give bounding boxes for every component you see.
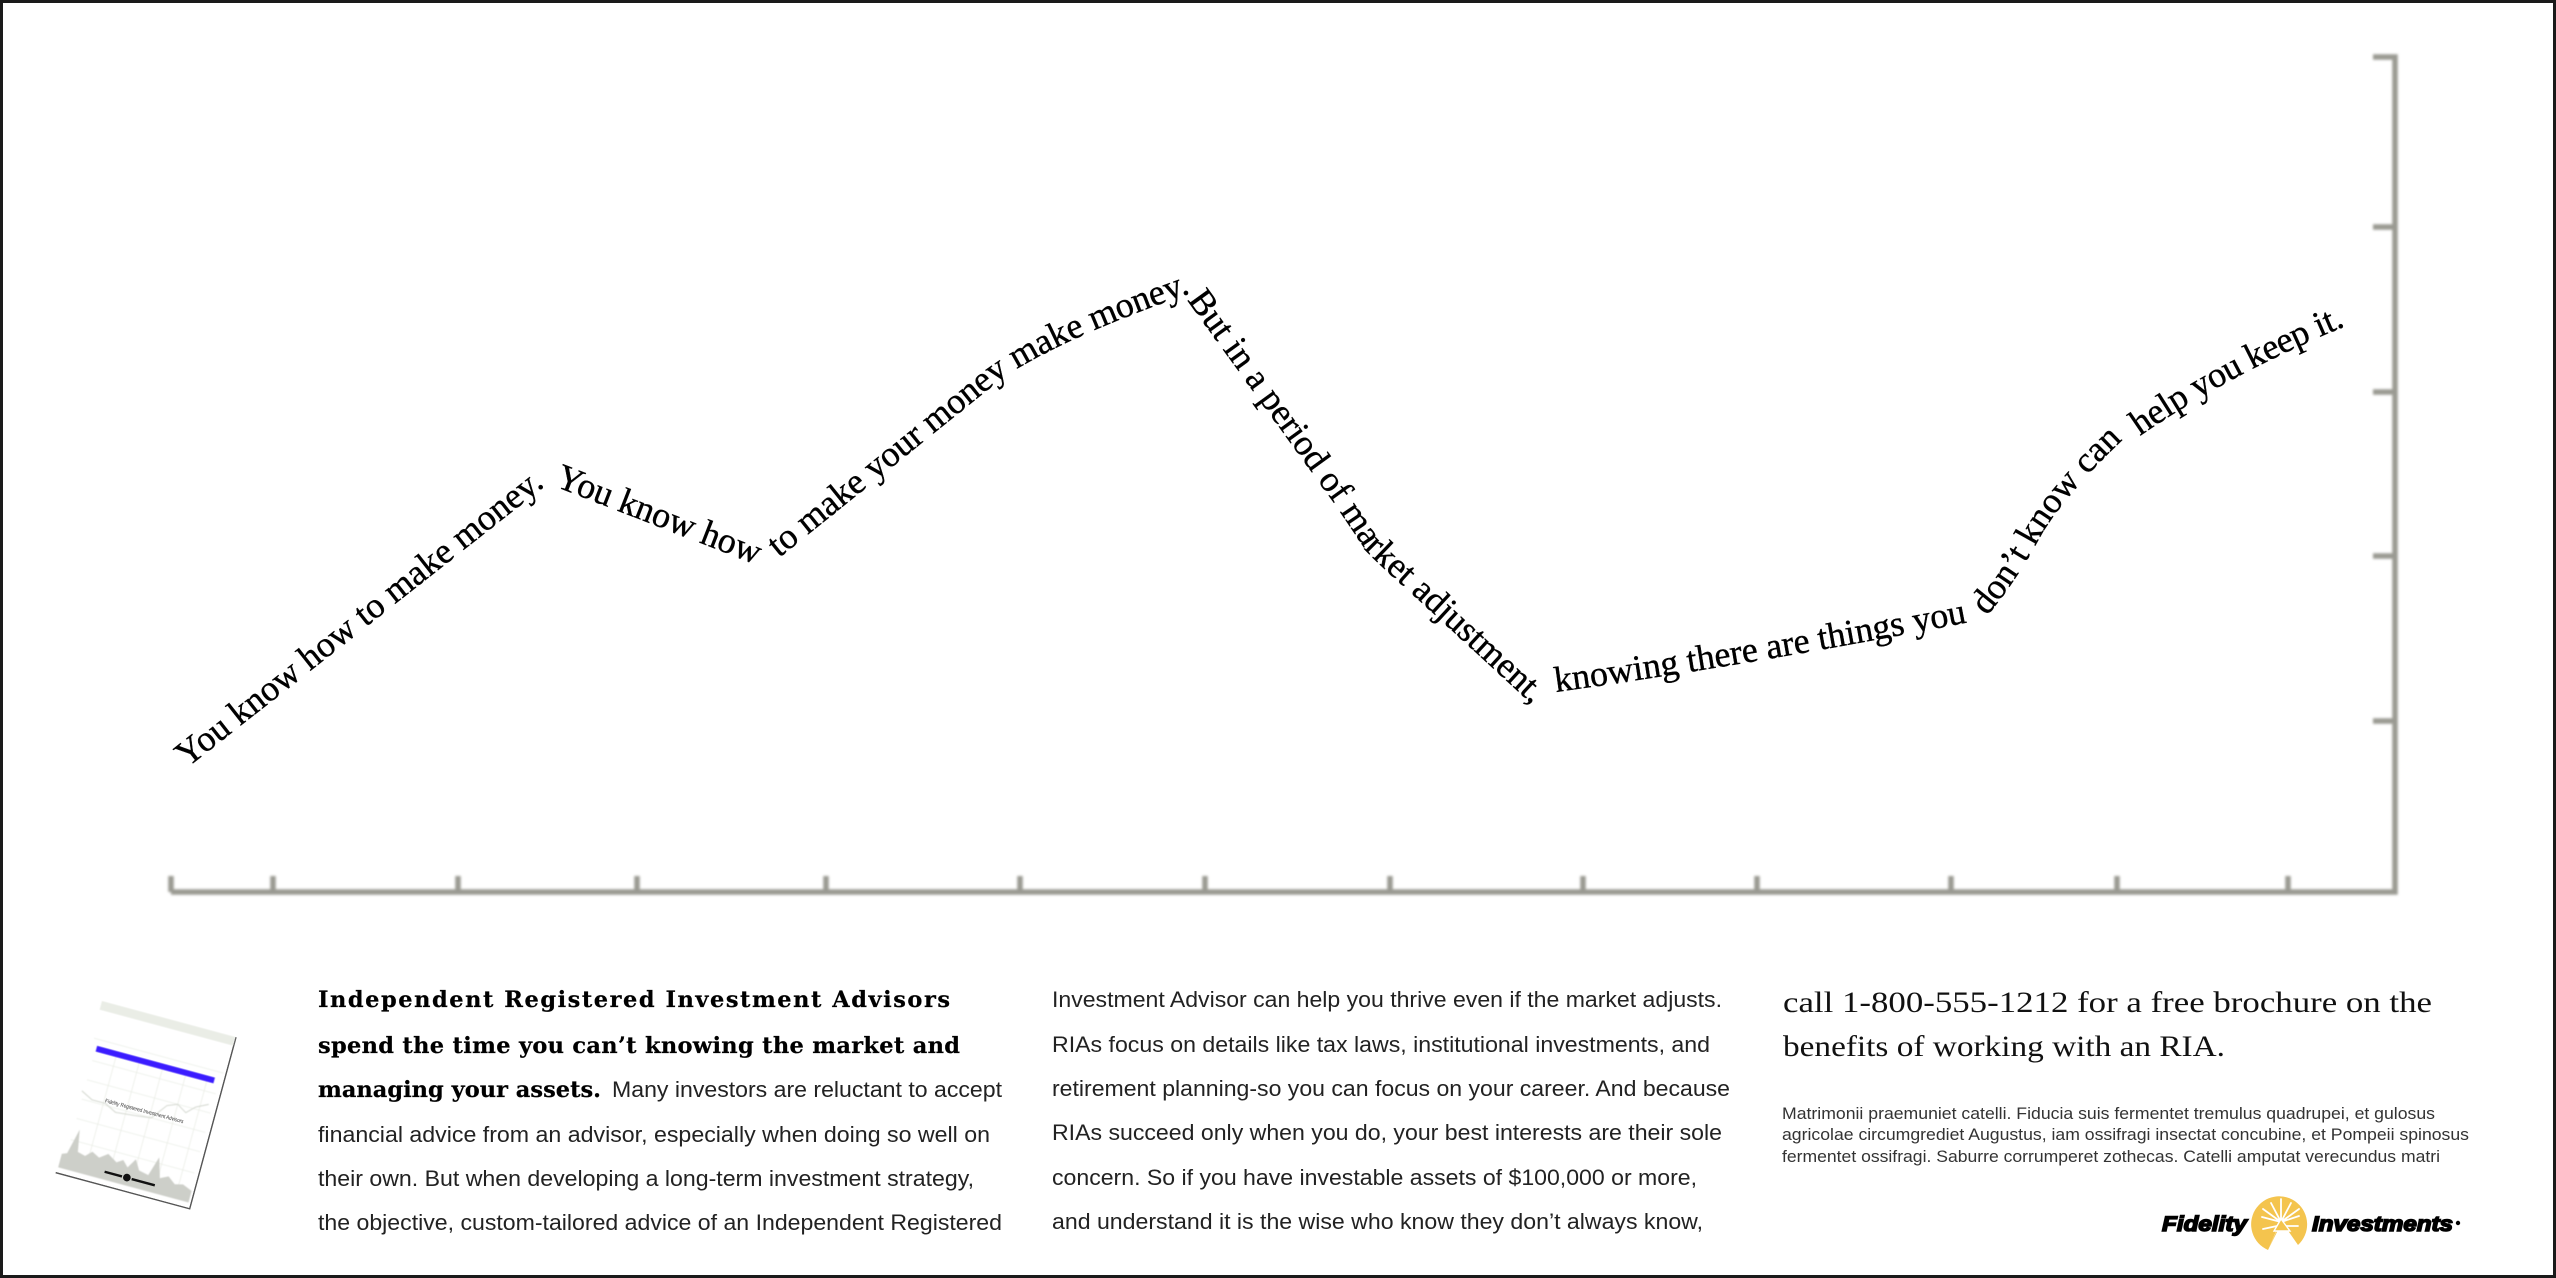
brochure blue bar [96,1046,215,1083]
body text column 1 [318,987,1003,1235]
brochure shadow [55,1001,237,1210]
fine print: agricolae circumgrediet Augustus, iam ossifragi insectat concubine, et Pompeii spinosus [1782,1125,2469,1144]
brochure title: Fidelity Registered Investment Advisors [104,1098,184,1125]
call to action: call 1-800-555-1212 for a free brochure on the [1783,986,2432,1019]
body text column 1: Many investors are reluctant to accept [612,1077,1003,1102]
body text column 2: RIAs succeed only when you do, your best interests are their sole [1052,1120,1722,1145]
chart line made of text: You know how to make money. [172,476,543,764]
body text column 2 [1052,987,1730,1234]
fine print: Matrimonii praemuniet catelli. Fiducia suis fermentet tremulus quadrupei, et gulosus [1782,1104,2435,1123]
body text column 1: Independent Registered Investment Advisors [318,987,950,1013]
body text column 2: concern. So if you have investable assets of $100,000 or more, [1052,1165,1697,1190]
registered mark [2456,1221,2460,1225]
call to action [1783,986,2432,1063]
body text column 1: the objective, custom-tailored advice of an Independent Registered [318,1210,1002,1235]
body text column 1: their own. But when developing a long-term investment strategy, [318,1166,974,1191]
brochure logo [104,1168,156,1189]
chart axes [171,57,2395,892]
body text column 2: Investment Advisor can help you thrive even if the market adjusts. [1052,987,1722,1012]
chart line made of text: help you keep it. [2126,312,2344,436]
fine print [1782,1104,2469,1166]
body text column 2: retirement planning-so you can focus on your career. And because [1052,1076,1730,1101]
fine print: fermentet ossifragi. Saburre corrumperet zothecas. Catelli amputat verecundus matri [1782,1147,2440,1166]
chart line made of text: But in a period of market adjustment, [1187,286,1537,705]
Fidelity Investments logo [2162,1196,2460,1250]
chart line made of text [172,279,2344,764]
chart line made of text: to make your money make money. [769,279,1188,556]
icon: sun logo [2251,1196,2307,1250]
body text column 1: managing your assets. [318,1077,601,1103]
body text column 1: spend the time you can’t knowing the market and [318,1033,960,1059]
brochure volume chart [58,1127,199,1202]
body text column 2: RIAs focus on details like tax laws, institutional investments, and [1052,1032,1710,1057]
Fidelity Investments logo: Fidelity [2162,1213,2249,1236]
Fidelity Investments logo: Investments [2312,1213,2453,1236]
chart line made of text: don’t know can [1973,430,2122,613]
call to action: benefits of working with an RIA. [1783,1030,2225,1063]
body text column 2: and understand it is the wise who know they don’t always know, [1052,1209,1703,1234]
body text column 1: financial advice from an advisor, especially when doing so well on [318,1122,990,1147]
chart line made of text: knowing there are things you [1552,606,1967,692]
brochure thumbnail [55,1001,237,1210]
chart line made of text: You know how [560,464,762,562]
